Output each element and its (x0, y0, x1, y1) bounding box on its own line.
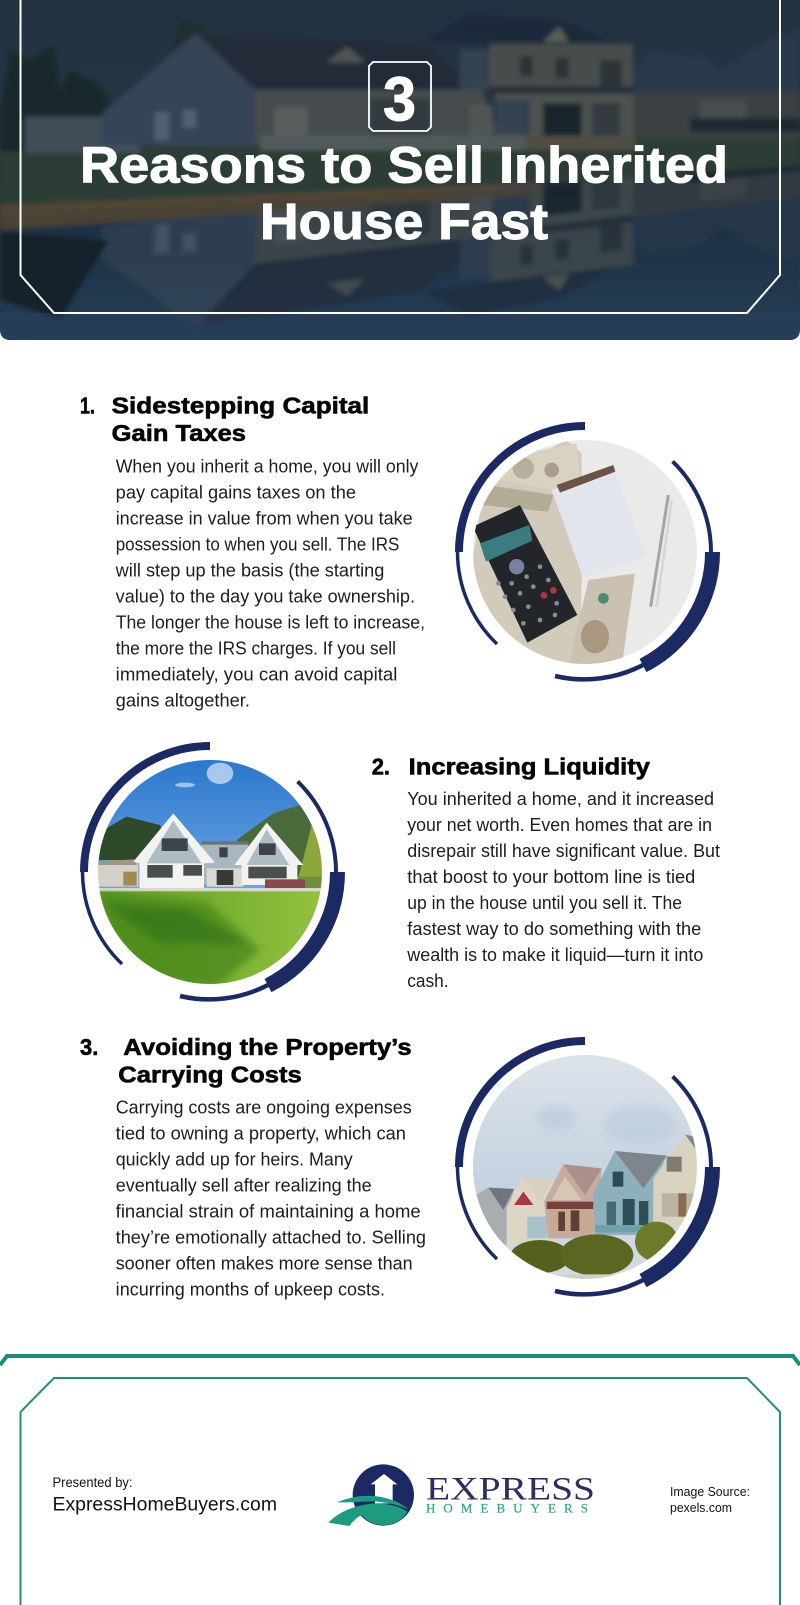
section 2 heading: 2. (372, 753, 390, 779)
image source credit (670, 1485, 750, 1515)
section 3 body text: they’re emotionally attached to. Selling (116, 1227, 426, 1247)
section 1 heading: 1. (80, 392, 95, 418)
logo (328, 1464, 595, 1526)
section 1 body text: When you inherit a home, you will only (116, 456, 418, 476)
presented by credit: Presented by: (52, 1475, 132, 1490)
section 3 body text: eventually sell after realizing the (116, 1175, 372, 1195)
section 3 body text (116, 1097, 426, 1299)
section 3 body text: financial strain of maintaining a home (116, 1201, 421, 1221)
ring accents (457, 1041, 712, 1294)
section 1 body text: the more the IRS charges. If you sell (116, 638, 396, 658)
section 2 body text: disrepair still have significant value. But (407, 841, 720, 861)
footer top band (0, 1356, 800, 1365)
section 1 heading: Sidestepping Capital (112, 392, 369, 418)
section 3 photo: painted lady houses (457, 1041, 712, 1294)
section 1 heading (80, 392, 369, 446)
section 1 body text: will step up the basis (the starting (115, 560, 384, 580)
section 1 heading: Gain Taxes (112, 420, 246, 446)
section 3: carrying costs (80, 1034, 712, 1299)
section 2 body text: that boost to your bottom line is tied (407, 867, 695, 887)
section 1 body text: increase in value from when you take (116, 508, 413, 528)
section 2 body text: You inherited a home, and it increased (407, 789, 714, 809)
image source credit: pexels.com (670, 1501, 732, 1515)
section 1 body text (115, 456, 425, 710)
presented by credit (52, 1475, 277, 1516)
section 3 heading: Avoiding the Property’s (123, 1034, 412, 1060)
number badge (369, 62, 431, 134)
section 3 body text: tied to owning a property, which can (116, 1123, 406, 1143)
logo: HOMEBUYERS (426, 1501, 588, 1516)
title: House Fast (260, 193, 548, 250)
header banner (0, 0, 800, 359)
title (80, 136, 728, 250)
section 1 body text: pay capital gains taxes on the (116, 482, 356, 502)
presented by credit: ExpressHomeBuyers.com (52, 1494, 277, 1516)
header background photo: lakeside houses (0, 0, 800, 359)
section 1 body text: The longer the house is left to increase, (116, 612, 425, 632)
ring accents (457, 426, 712, 679)
section 2 photo: white house and lawn (82, 746, 337, 999)
section 3 body text: sooner often makes more sense than (116, 1253, 413, 1273)
section 3 heading: 3. (80, 1034, 98, 1060)
header frame (20, 0, 780, 313)
section 3 body text: Carrying costs are ongoing expenses (116, 1097, 412, 1117)
section 3 body text: quickly add up for heirs. Many (116, 1149, 353, 1169)
footer frame (20, 1378, 780, 1605)
section 3 heading: Carrying Costs (118, 1061, 302, 1087)
section 2 body text: cash. (407, 971, 449, 991)
section 2: liquidity (82, 746, 720, 999)
section 1 body text: possession to when you sell. The IRS (116, 534, 399, 554)
section 3 body text: incurring months of upkeep costs. (116, 1279, 385, 1299)
footer (0, 1356, 800, 1605)
number badge: 3 (383, 66, 416, 134)
ring accents (82, 746, 337, 999)
logo icon: house on hill (328, 1464, 414, 1526)
section 1: capital gains (80, 392, 712, 710)
logo wordmark: EXPRESS (426, 1471, 595, 1507)
section 2 body text (406, 789, 720, 991)
section 1 photo: calculator and money (457, 426, 712, 679)
section 2 body text: your net worth. Even homes that are in (407, 815, 712, 835)
section 2 body text: up in the house until you sell it. The (407, 893, 682, 913)
section 1 body text: immediately, you can avoid capital (116, 664, 397, 684)
section 3 heading (80, 1034, 412, 1087)
section 1 body text: value) to the day you take ownership. (116, 586, 415, 606)
title: Reasons to Sell Inherited (80, 136, 728, 194)
section 2 heading: Increasing Liquidity (409, 753, 650, 779)
section 1 body text: gains altogether. (116, 690, 250, 710)
section 2 body text: wealth is to make it liquid—turn it into (406, 945, 703, 965)
image source credit: Image Source: (670, 1485, 750, 1499)
section 2 body text: fastest way to do something with the (407, 919, 701, 939)
